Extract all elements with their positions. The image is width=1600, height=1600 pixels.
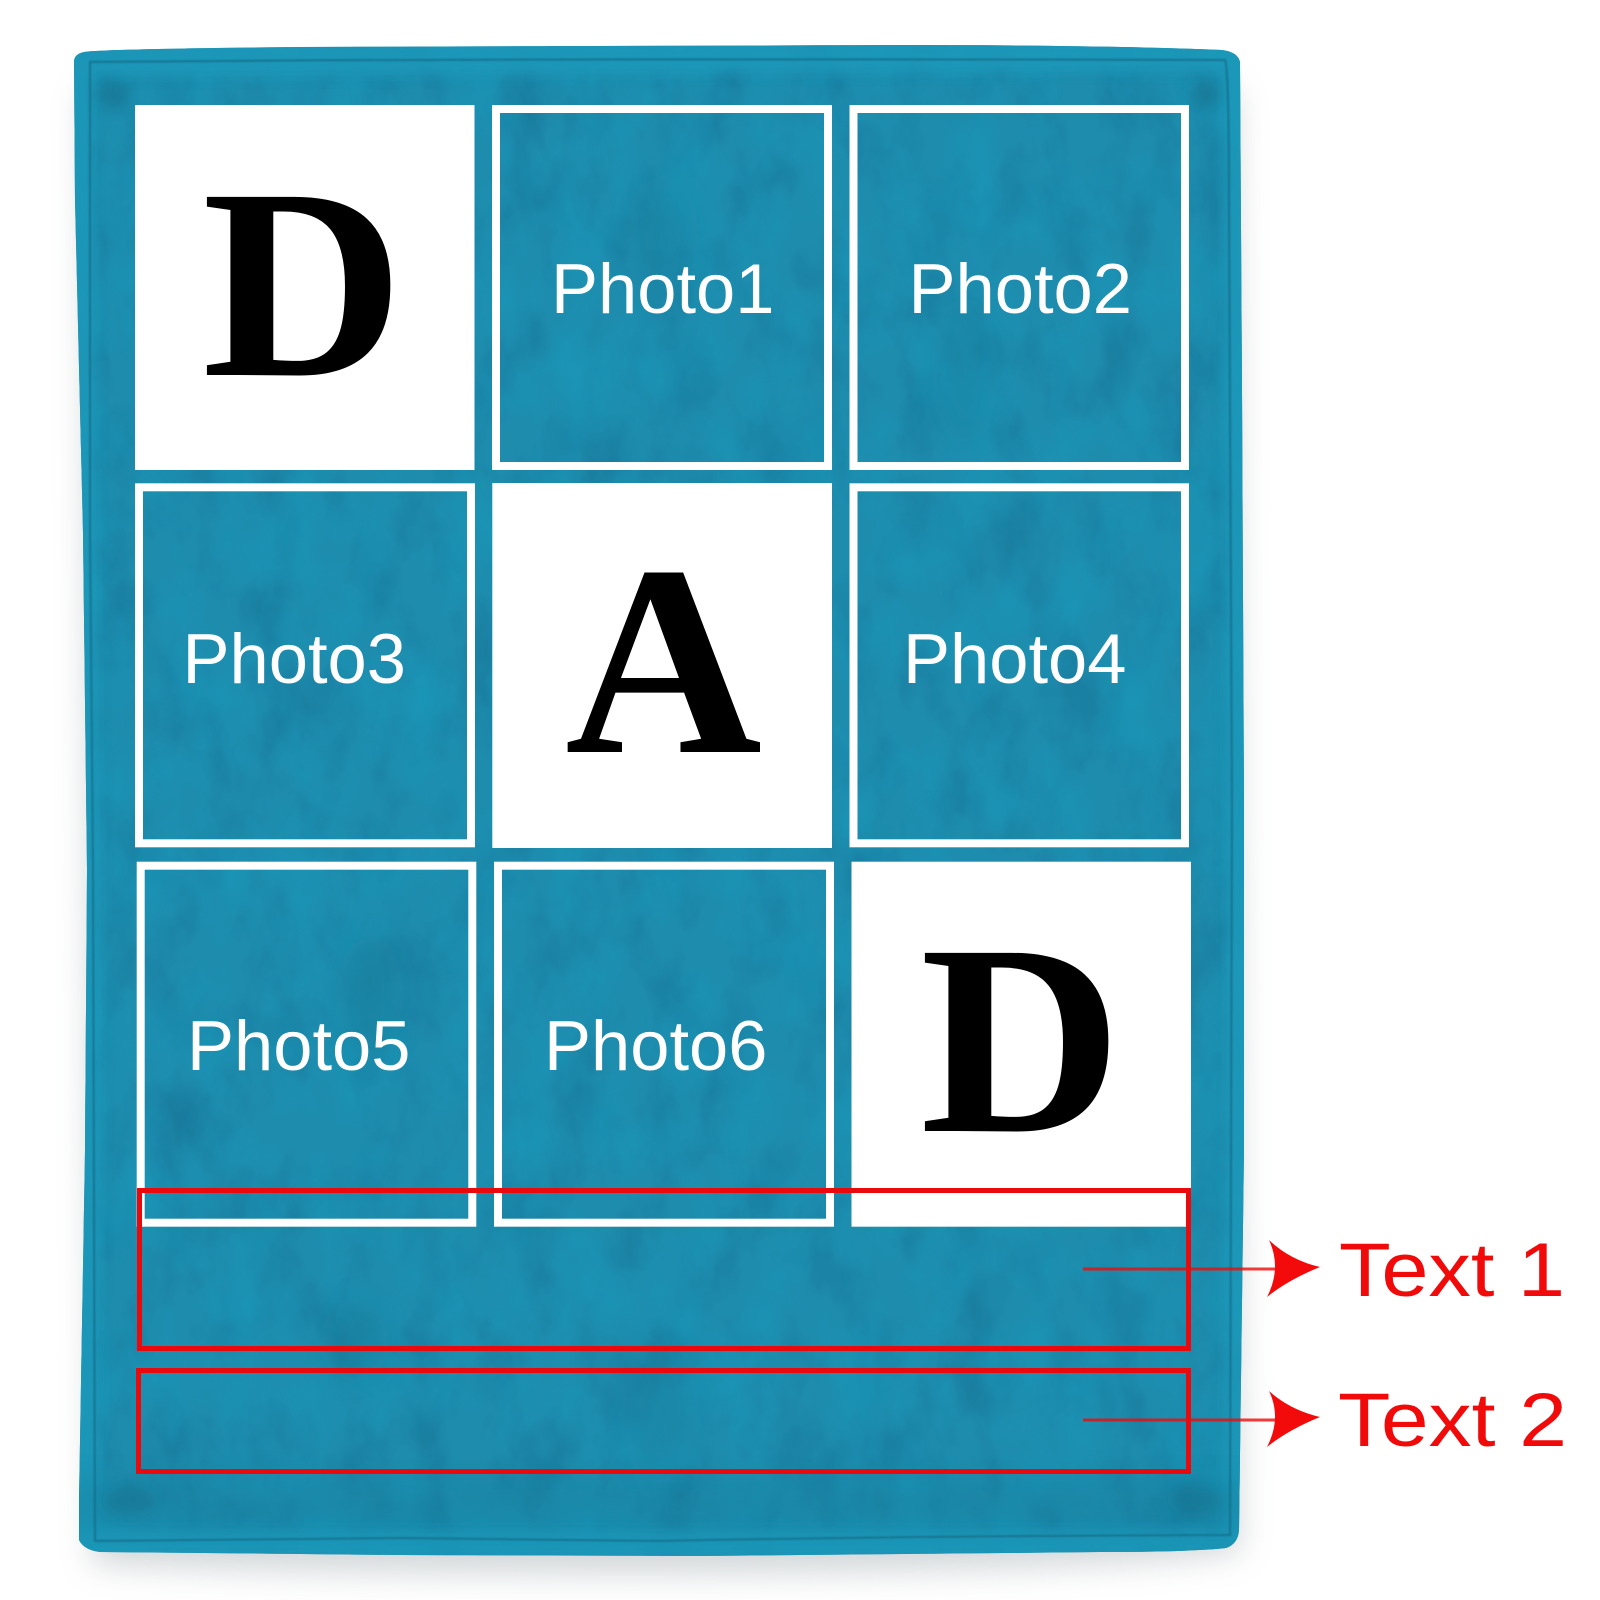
red frame: text area 2: [138, 1370, 1188, 1472]
panel: blanket background: [60, 30, 1260, 1570]
photo cell: Photo3: [139, 487, 471, 843]
photo cell: Photo1: [496, 109, 828, 466]
photo cell: Photo2: [854, 109, 1185, 466]
photo cell: Photo4: [854, 487, 1185, 843]
red frame: text area 1: [140, 1190, 1188, 1348]
photo cell: Photo6: Photo6: [544, 1006, 767, 1085]
letter cell: D (top left): [135, 105, 474, 470]
letter cell: D (bottom right): [852, 862, 1191, 1227]
label: Text 1: Text 1: [1339, 1228, 1565, 1313]
photo cell: Photo6: [498, 866, 830, 1223]
letter cell: D (bottom right): D: [920, 889, 1122, 1190]
arrow: to Text 2: [1083, 1391, 1320, 1447]
letter cell: A (center): A: [565, 510, 762, 811]
photo cell: Photo2: Photo2: [908, 249, 1132, 328]
photo cell: Photo4: Photo4: [903, 619, 1126, 698]
arrow: to Text 1: [1083, 1240, 1320, 1297]
photo cell: Photo1: Photo1: [551, 249, 774, 328]
photo cell: Photo3: Photo3: [182, 619, 406, 698]
blanket shadow: [84, 90, 1240, 1574]
letter cell: A (center): [492, 483, 832, 848]
photo cell: Photo5: [141, 866, 472, 1223]
photo cell: Photo5: Photo5: [187, 1006, 410, 1085]
letter cell: D (top left): D: [202, 133, 404, 434]
label: Text 2: Text 2: [1338, 1378, 1567, 1463]
